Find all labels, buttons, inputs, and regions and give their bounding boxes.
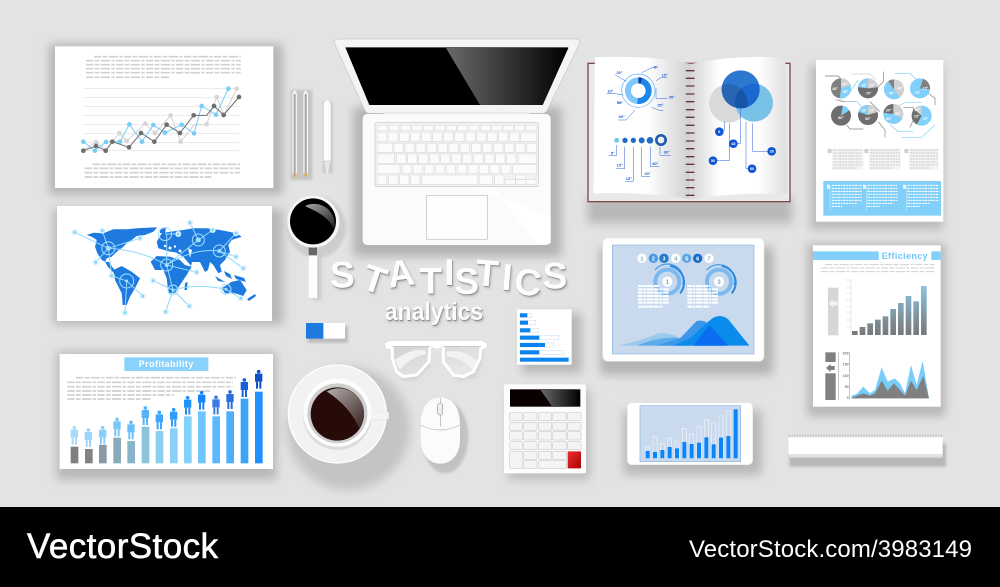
heading: analytics: analytics xyxy=(385,299,483,326)
heading: STATISTICS: T xyxy=(419,259,442,301)
keyboard xyxy=(375,123,538,187)
efficiency area chart: 50 xyxy=(845,385,849,389)
pie labels: 18° xyxy=(861,108,867,112)
venn callouts: 50 xyxy=(711,159,715,163)
efficiency area chart: 200 xyxy=(843,352,849,356)
panel: efficiency document xyxy=(807,243,946,417)
venn callouts: 28 xyxy=(770,150,774,154)
small donut row: 15° xyxy=(617,163,623,168)
tablet text blocks xyxy=(638,286,718,307)
radial graphic 2: 3 xyxy=(717,280,721,286)
icon: coffee mug top view xyxy=(287,196,346,300)
icon: mouse xyxy=(421,398,468,473)
pie labels: 15° xyxy=(914,115,920,119)
efficiency area chart xyxy=(825,352,929,400)
small donut row: 80° xyxy=(664,149,670,154)
numbered circles xyxy=(637,254,714,263)
radial graphic 1: 1 xyxy=(666,280,670,286)
blue text panel xyxy=(823,181,941,216)
efficiency area chart: 100 xyxy=(843,374,849,378)
heading: STATISTICS: T xyxy=(357,256,392,303)
pie labels: 36° xyxy=(843,90,849,94)
panel: smartphone xyxy=(623,403,762,475)
pie labels: 20° xyxy=(886,108,892,112)
pie labels: 48° xyxy=(897,86,903,90)
heading: STATISTICS: A xyxy=(385,250,417,296)
icon: calculator xyxy=(504,384,590,480)
map connections xyxy=(75,223,243,313)
trackpad xyxy=(426,195,488,239)
panel: horizontal bar note xyxy=(517,309,582,373)
small donut row: 20° xyxy=(644,171,651,176)
donut callouts: 60° xyxy=(617,100,623,105)
radial graphic 2 xyxy=(707,265,736,294)
venn callouts: 8 xyxy=(718,130,720,134)
efficiency text xyxy=(821,265,934,272)
panel: world map document xyxy=(53,206,283,325)
pie labels: 20° xyxy=(842,82,848,86)
donut callouts: 10° xyxy=(607,89,614,94)
profitability people xyxy=(71,370,262,447)
numbered circles: 7 xyxy=(707,256,711,262)
efficiency area chart: 0 xyxy=(847,396,849,400)
pie labels: 15° xyxy=(923,86,929,90)
panel: laptop xyxy=(334,39,580,257)
small donut row xyxy=(609,135,671,181)
pie labels: 14° xyxy=(869,108,875,112)
profitability title: Profitability xyxy=(139,359,193,369)
numbered circles: 6 xyxy=(696,256,699,262)
heading: STATISTICS: S xyxy=(543,255,567,297)
heading: STATISTICS: I xyxy=(500,256,514,298)
icon: ruler xyxy=(788,436,946,467)
donut callouts: 60° xyxy=(619,114,625,119)
profitability text xyxy=(67,378,236,399)
heading: STATISTICS: I xyxy=(444,251,455,293)
icon: pencils and pen xyxy=(291,90,333,180)
numbered circles: 2 xyxy=(652,256,655,262)
panel: profitability document xyxy=(57,352,277,480)
numbered circles: 5 xyxy=(685,256,688,262)
pie labels: 15° xyxy=(915,108,921,112)
pie labels: 60° xyxy=(886,117,892,121)
world map xyxy=(72,220,256,316)
venn callouts xyxy=(709,108,776,173)
venn callouts: 48 xyxy=(731,142,735,146)
connector lines xyxy=(825,72,935,137)
panel: line chart document xyxy=(49,44,283,195)
radial graphic 1 xyxy=(655,264,684,294)
donut callouts: 5° xyxy=(654,65,658,70)
footer url: VectorStock.com/3983149 xyxy=(689,536,972,563)
panel: tablet xyxy=(600,238,773,375)
panel: pie chart document xyxy=(810,60,943,230)
venn callouts: 60 xyxy=(750,167,754,171)
numbered circles: 4 xyxy=(674,256,678,262)
heading: STATISTICS: S xyxy=(454,260,479,302)
icon: glasses xyxy=(385,341,487,381)
pie labels xyxy=(832,82,929,121)
footer bar xyxy=(0,507,1000,587)
numbered circles: 3 xyxy=(662,256,666,262)
donut callouts: 35° xyxy=(657,103,664,108)
heading: STATISTICS: T xyxy=(474,251,501,295)
pie labels: 48° xyxy=(832,87,838,91)
icon: coffee cup and saucer xyxy=(287,365,410,490)
heading: STATISTICS: S xyxy=(330,253,355,295)
donut callouts xyxy=(607,65,675,120)
area chart xyxy=(618,316,749,346)
pie labels: 18° xyxy=(861,83,867,87)
small donut row: 15° xyxy=(626,176,632,181)
pie labels: 12° xyxy=(869,83,875,87)
donut callouts: 20° xyxy=(616,70,623,75)
numbered circles: 1 xyxy=(640,256,644,262)
laptop base xyxy=(363,112,551,245)
efficiency title xyxy=(813,251,941,261)
calculator red key xyxy=(568,451,581,468)
laptop lid xyxy=(334,39,580,113)
map nodes xyxy=(72,220,246,316)
panel: spiral notebook xyxy=(587,57,792,223)
text block top xyxy=(86,57,241,77)
donut callouts: 45° xyxy=(669,95,675,100)
venn diagram xyxy=(709,70,773,123)
spiral binding xyxy=(686,71,694,195)
profitability bars xyxy=(71,392,263,463)
phone bar chart xyxy=(646,409,738,458)
pie charts xyxy=(836,83,927,121)
pie labels: 75° xyxy=(915,91,921,95)
pie labels: 70° xyxy=(866,92,872,96)
pie labels: 70° xyxy=(923,117,929,121)
pie labels: 80° xyxy=(838,116,844,120)
small donut row: 5° xyxy=(611,150,615,155)
text block bottom xyxy=(85,164,240,177)
profitability title xyxy=(124,357,208,371)
pie labels: 50° xyxy=(889,92,895,96)
line chart xyxy=(81,86,241,153)
footer logo: VectorStock xyxy=(27,527,218,566)
gray text columns xyxy=(828,149,939,170)
heading: STATISTICS: C xyxy=(512,260,544,304)
icon: eraser xyxy=(306,323,348,343)
efficiency title: Efficiency xyxy=(882,251,928,261)
heading: STATISTICS xyxy=(330,250,567,304)
small donut row: 60° xyxy=(652,161,659,166)
donut callouts: 15° xyxy=(662,73,668,78)
donut chart xyxy=(622,74,655,107)
efficiency area chart: 150 xyxy=(843,362,849,366)
bar chart xyxy=(520,313,569,362)
pie labels: 60° xyxy=(865,117,871,121)
pie labels: 40° xyxy=(895,112,901,116)
efficiency bar chart xyxy=(828,279,927,335)
